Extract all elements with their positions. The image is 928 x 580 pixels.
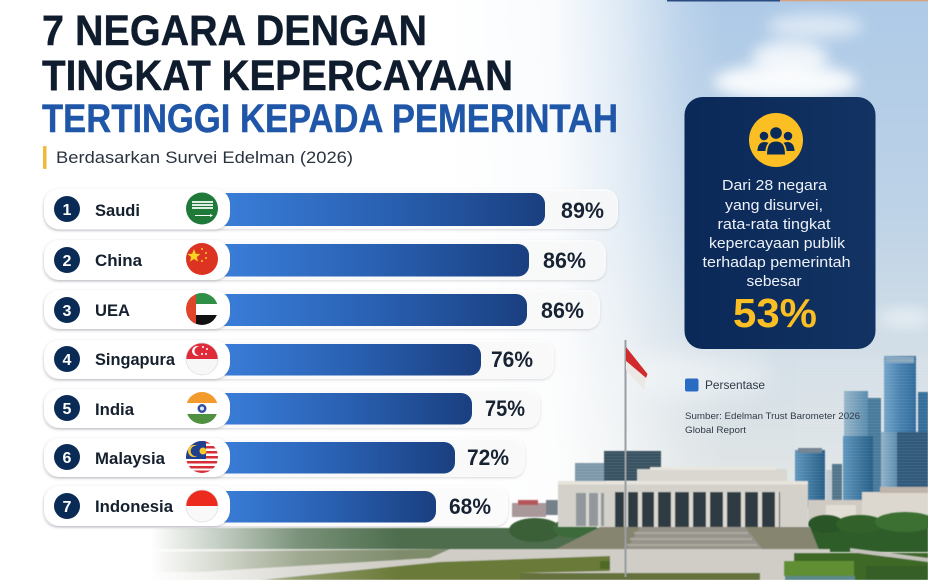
row 5: India 75%: India xyxy=(95,400,135,419)
callout text: Dari 28 negara xyxy=(722,178,828,194)
callout text: sebesar xyxy=(746,274,802,290)
title: TINGKAT KEPERCAYAAN xyxy=(42,52,513,100)
callout text: terhadap pemerintah xyxy=(702,255,850,271)
row 1: Saudi 89%: 1 xyxy=(63,202,72,219)
callout text: kepercayaan publik xyxy=(709,236,846,252)
row 7: Indonesia 68% xyxy=(44,486,508,526)
row 3: UEA 86%: UEA xyxy=(95,301,130,320)
title: TERTINGGI KEPADA PEMERINTAH xyxy=(42,97,618,141)
callout text: yang disurvei, xyxy=(725,198,823,214)
row 6: Malaysia 72%: Malaysia xyxy=(95,449,166,468)
row 5: India 75%: 75% xyxy=(485,396,525,421)
row 7: Indonesia 68%: 7 xyxy=(63,499,72,516)
panel: national average callout xyxy=(684,97,876,349)
row 6: Malaysia 72%: 6 xyxy=(63,450,72,467)
title: 7 NEGARA DENGAN xyxy=(42,7,427,55)
source note xyxy=(685,411,860,436)
row 7: Indonesia 68%: Indonesia xyxy=(95,497,174,516)
row 6: Malaysia 72% xyxy=(44,438,525,477)
row 2: China 86% xyxy=(44,240,606,280)
source note: Sumber: Edelman Trust Barometer 2026 xyxy=(685,411,860,422)
row 4: Singapura 76%: 76% xyxy=(491,347,533,372)
row 3: UEA 86% xyxy=(44,290,600,329)
row 5: India 75% xyxy=(44,389,540,428)
row 6: Malaysia 72%: 72% xyxy=(467,445,509,470)
white fade across the ground xyxy=(0,522,400,580)
top edge accent xyxy=(667,0,928,2)
icon: people group xyxy=(749,113,803,167)
callout text: rata-rata tingkat xyxy=(718,217,830,233)
government building xyxy=(550,467,820,552)
row 3: UEA 86%: 3 xyxy=(63,303,72,320)
row 1: Saudi 89%: Saudi xyxy=(95,201,140,220)
callout value: 53% xyxy=(733,290,817,336)
city skyline xyxy=(512,356,928,520)
legend: Persentase xyxy=(705,380,765,392)
row 4: Singapura 76%: 4 xyxy=(63,352,72,369)
row 5: India 75%: 5 xyxy=(63,401,72,418)
trees xyxy=(150,512,928,552)
source note: Global Report xyxy=(685,425,746,436)
legend xyxy=(685,378,765,392)
row 2: China 86%: China xyxy=(95,251,143,270)
plaza and gardens xyxy=(150,548,928,580)
subtitle xyxy=(43,146,353,169)
subtitle: Berdasarkan Survei Edelman (2026) xyxy=(56,149,353,167)
row 7: Indonesia 68%: 68% xyxy=(449,494,491,519)
row 4: Singapura 76%: Singapura xyxy=(95,350,176,369)
row 1: Saudi 89%: 89% xyxy=(561,198,604,223)
row 1: Saudi 89% xyxy=(44,188,618,230)
row 4: Singapura 76% xyxy=(44,340,554,379)
row 2: China 86%: 2 xyxy=(63,253,72,270)
flagpole with Indonesian flag xyxy=(624,340,648,577)
title xyxy=(42,7,618,141)
row 2: China 86%: 86% xyxy=(543,248,586,273)
callout text xyxy=(702,178,850,290)
row 3: UEA 86%: 86% xyxy=(541,298,584,323)
